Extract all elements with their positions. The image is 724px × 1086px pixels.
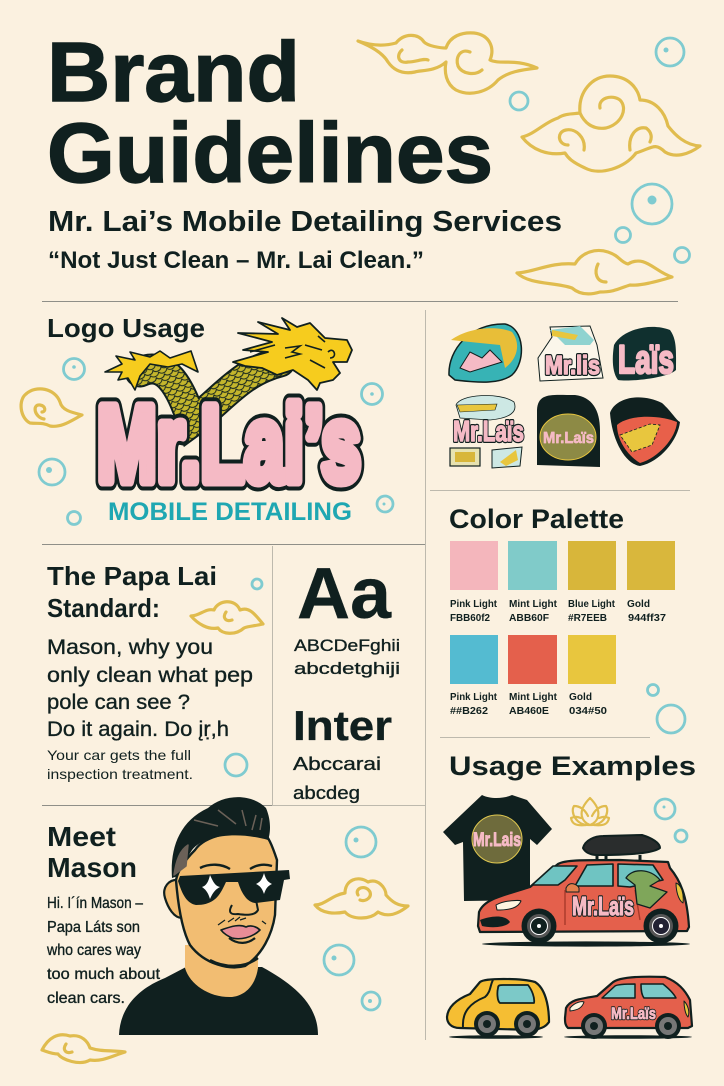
heading: meet mason: Meet xyxy=(47,821,116,852)
type specimen: ABCDeFghii xyxy=(294,636,400,655)
rear light xyxy=(676,883,683,903)
windows xyxy=(532,866,577,885)
mason bio: Hi. I´ín Mason – xyxy=(47,895,143,912)
variation 6 xyxy=(610,397,680,466)
yellow car xyxy=(447,979,549,1039)
swatch labels: Blue Light xyxy=(568,598,615,610)
mason portrait xyxy=(119,797,318,1035)
swatch labels: Pink Light xyxy=(450,691,497,703)
color swatches xyxy=(450,541,675,684)
variation 5: Mr.Laïs xyxy=(543,430,594,447)
small red car: Mr.Laïs xyxy=(611,1004,656,1023)
mouth xyxy=(221,926,260,939)
moustache xyxy=(218,917,266,925)
swatch labels: ABB60F xyxy=(509,612,550,624)
wheels xyxy=(522,908,556,944)
heading: papa lai standard: The Papa Lai xyxy=(47,561,217,591)
icon: lotus xyxy=(571,798,609,825)
standard quote: Mason, why you xyxy=(47,636,213,659)
heading: papa lai standard: Standard: xyxy=(47,593,160,623)
swatch labels: #R7EEB xyxy=(568,612,607,624)
swatch labels: AB460E xyxy=(509,705,549,717)
variation 4: Mr.Laïs xyxy=(453,416,524,448)
type specimen: Aa xyxy=(297,554,392,634)
standard note: inspection treatment. xyxy=(47,766,193,782)
cloud top right xyxy=(522,76,700,171)
small red car: Mr.Laïs xyxy=(611,1004,656,1023)
standard note: Your car gets the full xyxy=(47,747,191,763)
heading: color palette: Color Palette xyxy=(449,504,624,534)
type specimen: Inter xyxy=(293,702,392,749)
variation 3: Laïs xyxy=(618,338,674,382)
variation 2: Mr.lis xyxy=(545,350,600,380)
dragon head xyxy=(233,318,352,390)
t-shirt: Mr.Lais xyxy=(473,830,521,851)
standard quote: Do it again. Do įṛ,h xyxy=(47,718,229,741)
swatch labels: Mint Light xyxy=(509,598,557,610)
standard quote: pole can see ? xyxy=(47,691,190,714)
type specimen: abcdeg xyxy=(293,783,360,803)
type specimen: Abccarai xyxy=(293,754,381,774)
hair xyxy=(172,797,270,878)
logo subline: MOBILE DETAILING xyxy=(108,498,352,526)
mason bio: who cares way xyxy=(46,942,141,959)
ear xyxy=(164,880,182,918)
door line xyxy=(565,890,640,925)
logo wordmark: Mr.Lai’s xyxy=(97,383,361,504)
variation 4: Mr.Laïs xyxy=(453,416,524,448)
logo wordmark xyxy=(97,383,361,504)
tagline: “Not Just Clean – Mr. Lai Clean.” xyxy=(48,247,424,274)
body xyxy=(478,860,689,932)
variation 3: Laïs xyxy=(618,338,674,382)
heading: usage examples: Usage Examples xyxy=(449,751,696,781)
variation 2: Mr.lis xyxy=(545,350,600,380)
mason bio: Papa Láts son xyxy=(47,919,140,936)
face xyxy=(176,832,277,967)
heading: papa lai standard xyxy=(47,561,217,623)
sunglasses xyxy=(178,870,290,905)
variation 1 xyxy=(449,324,521,382)
variation 3 xyxy=(613,327,676,382)
neck xyxy=(185,945,258,997)
small red car xyxy=(564,977,692,1039)
mason bio: too much about xyxy=(47,966,161,983)
swatch labels: ##B262 xyxy=(450,705,488,717)
cloud mason right xyxy=(315,879,408,918)
variation 5 xyxy=(537,395,600,467)
swatch labels xyxy=(450,598,666,717)
heading: meet mason: Mason xyxy=(47,852,137,883)
roof box xyxy=(583,835,660,855)
standard note xyxy=(47,747,193,782)
large red car xyxy=(478,835,690,947)
swatch labels: Gold xyxy=(627,598,650,610)
dragon body xyxy=(140,362,280,422)
variation 4 xyxy=(450,396,524,468)
cloud bottom right xyxy=(517,250,672,294)
title xyxy=(47,25,493,200)
swatch labels: 034#50 xyxy=(569,705,607,717)
title: Guidelines xyxy=(47,106,493,200)
swatch labels: Mint Light xyxy=(509,691,557,703)
cloud mason bottom xyxy=(42,1035,125,1062)
heading: meet mason xyxy=(47,821,137,883)
swatch labels: FBB60f2 xyxy=(450,612,490,624)
logo dragon xyxy=(105,318,352,422)
cloud logo left xyxy=(21,389,82,426)
shadow xyxy=(482,941,690,947)
car logo: Mr.Laïs xyxy=(572,891,634,921)
type specimen: abcdetghiji xyxy=(294,659,400,678)
cloud papa lai xyxy=(191,602,263,633)
type specimen xyxy=(293,554,400,803)
logo variations xyxy=(449,324,680,468)
standard quote: only clean what pep xyxy=(47,664,253,687)
heading: logo usage: Logo Usage xyxy=(47,313,205,343)
mason bio xyxy=(46,895,161,1007)
subtitle: Mr. Lai’s Mobile Detailing Services xyxy=(48,206,562,238)
swatch labels: 944ff37 xyxy=(628,612,666,624)
cloud top left xyxy=(358,33,537,93)
shirt xyxy=(119,967,318,1035)
car dragon xyxy=(626,871,667,908)
mason bio: clean cars. xyxy=(47,990,125,1007)
dragon tail fin xyxy=(105,351,198,390)
large red car: Mr.Laïs xyxy=(572,891,634,921)
standard quote xyxy=(47,636,253,741)
swatch labels: Gold xyxy=(569,691,592,703)
variation 2 xyxy=(538,326,603,381)
swatch labels: Pink Light xyxy=(450,598,497,610)
t-shirt xyxy=(443,795,552,901)
title: Brand xyxy=(47,25,300,119)
brows xyxy=(200,865,272,869)
nose xyxy=(230,900,258,915)
logo wordmark: Mr.Lai’s xyxy=(97,383,361,504)
